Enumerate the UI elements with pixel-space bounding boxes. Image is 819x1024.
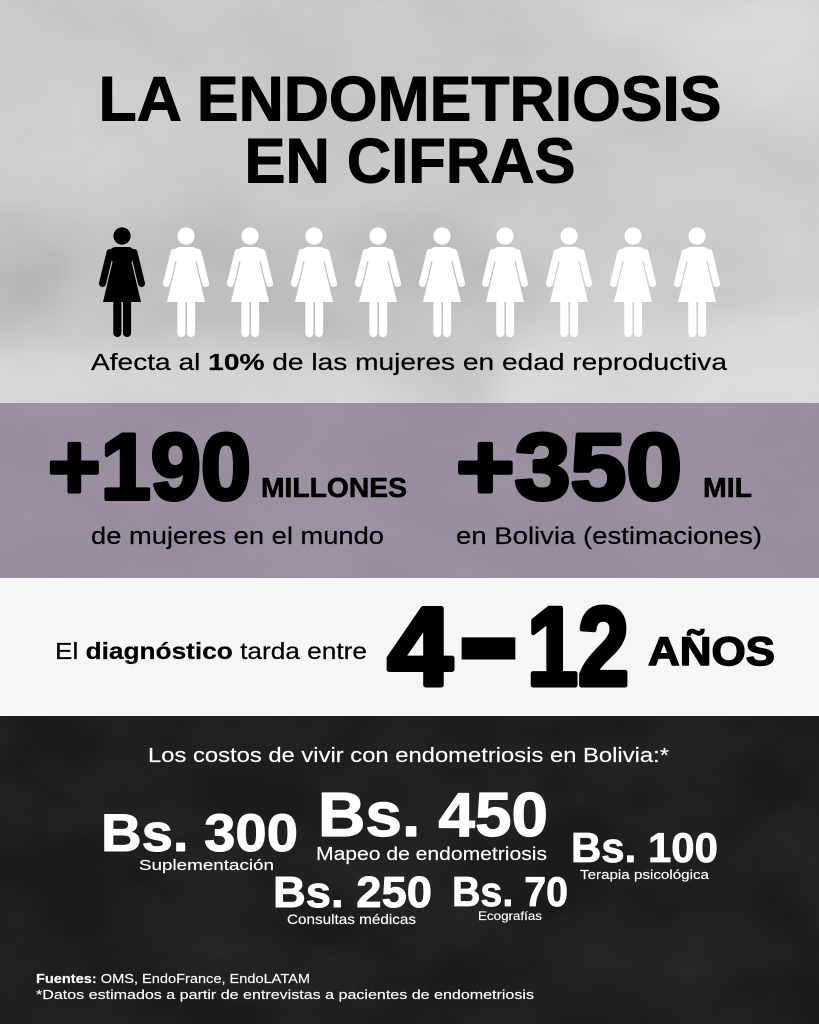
panel: crumpled grey paper header (0, 0, 819, 420)
cost: medical consultations: Bs. 250 (273, 868, 432, 917)
cost: endometriosis mapping: Bs. 450 (318, 781, 548, 850)
cost: ultrasounds: Bs. 70 (452, 868, 568, 915)
stat: diagnosis delay: – (465, 591, 512, 693)
cost: psychological therapy: Bs. 100 (571, 824, 718, 871)
stat: 190 million worldwide: +190 (48, 414, 251, 519)
stat: diagnosis delay: 12 (527, 585, 629, 709)
heading: living costs: Los costos de vivir con endometriosis en Bolivia:* (148, 744, 669, 767)
icon: highlighted black woman (102, 227, 142, 337)
footer: sources and note (36, 971, 535, 1002)
stat: 350 thousand in Bolivia: en Bolivia (estimaciones) (456, 523, 762, 550)
title: EN CIFRAS (244, 126, 576, 196)
stat: diagnosis delay: El diagnóstico tarda entre (55, 638, 367, 664)
stat: 190 million worldwide: MILLONES (261, 472, 407, 503)
panel: white diagnosis band (0, 578, 819, 716)
stat: 190 million worldwide (48, 414, 407, 550)
cost: supplementation: Bs. 300 (101, 804, 298, 863)
stat: 190 million worldwide: de mujeres en el mundo (91, 523, 384, 550)
cost: medical consultations: Consultas médicas (287, 911, 416, 927)
panel: dark costs band (170, 732, 819, 990)
cost: psychological therapy: Terapia psicológica (580, 867, 710, 882)
footer: sources and note: Fuentes: OMS, EndoFrance, EndoLATAM (36, 971, 310, 986)
title: LA ENDOMETRIOSIS (98, 64, 722, 134)
pictogram: one in ten women (102, 227, 716, 337)
footer: sources and note: *Datos estimados a partir de entrevistas a pacientes de endometriosis (36, 987, 535, 1002)
stat: diagnosis delay: 4 (388, 585, 453, 709)
panel: purple statistics band (0, 403, 819, 578)
stat: diagnosis delay (55, 585, 775, 709)
stat: 350 thousand in Bolivia: +350 (456, 414, 682, 519)
text: prevalence caption: Afecta al 10% de las mujeres en edad reproductiva (91, 349, 727, 375)
cost: endometriosis mapping: Mapeo de endometriosis (316, 844, 547, 864)
title (98, 64, 722, 196)
stat: diagnosis delay: AÑOS (648, 628, 775, 674)
icons: nine white women (166, 227, 716, 337)
stat: 350 thousand in Bolivia: MIL (703, 472, 752, 503)
cost: supplementation: Suplementación (139, 857, 274, 874)
cost: ultrasounds: Ecografías (478, 909, 542, 923)
stat: 350 thousand in Bolivia (456, 414, 762, 550)
